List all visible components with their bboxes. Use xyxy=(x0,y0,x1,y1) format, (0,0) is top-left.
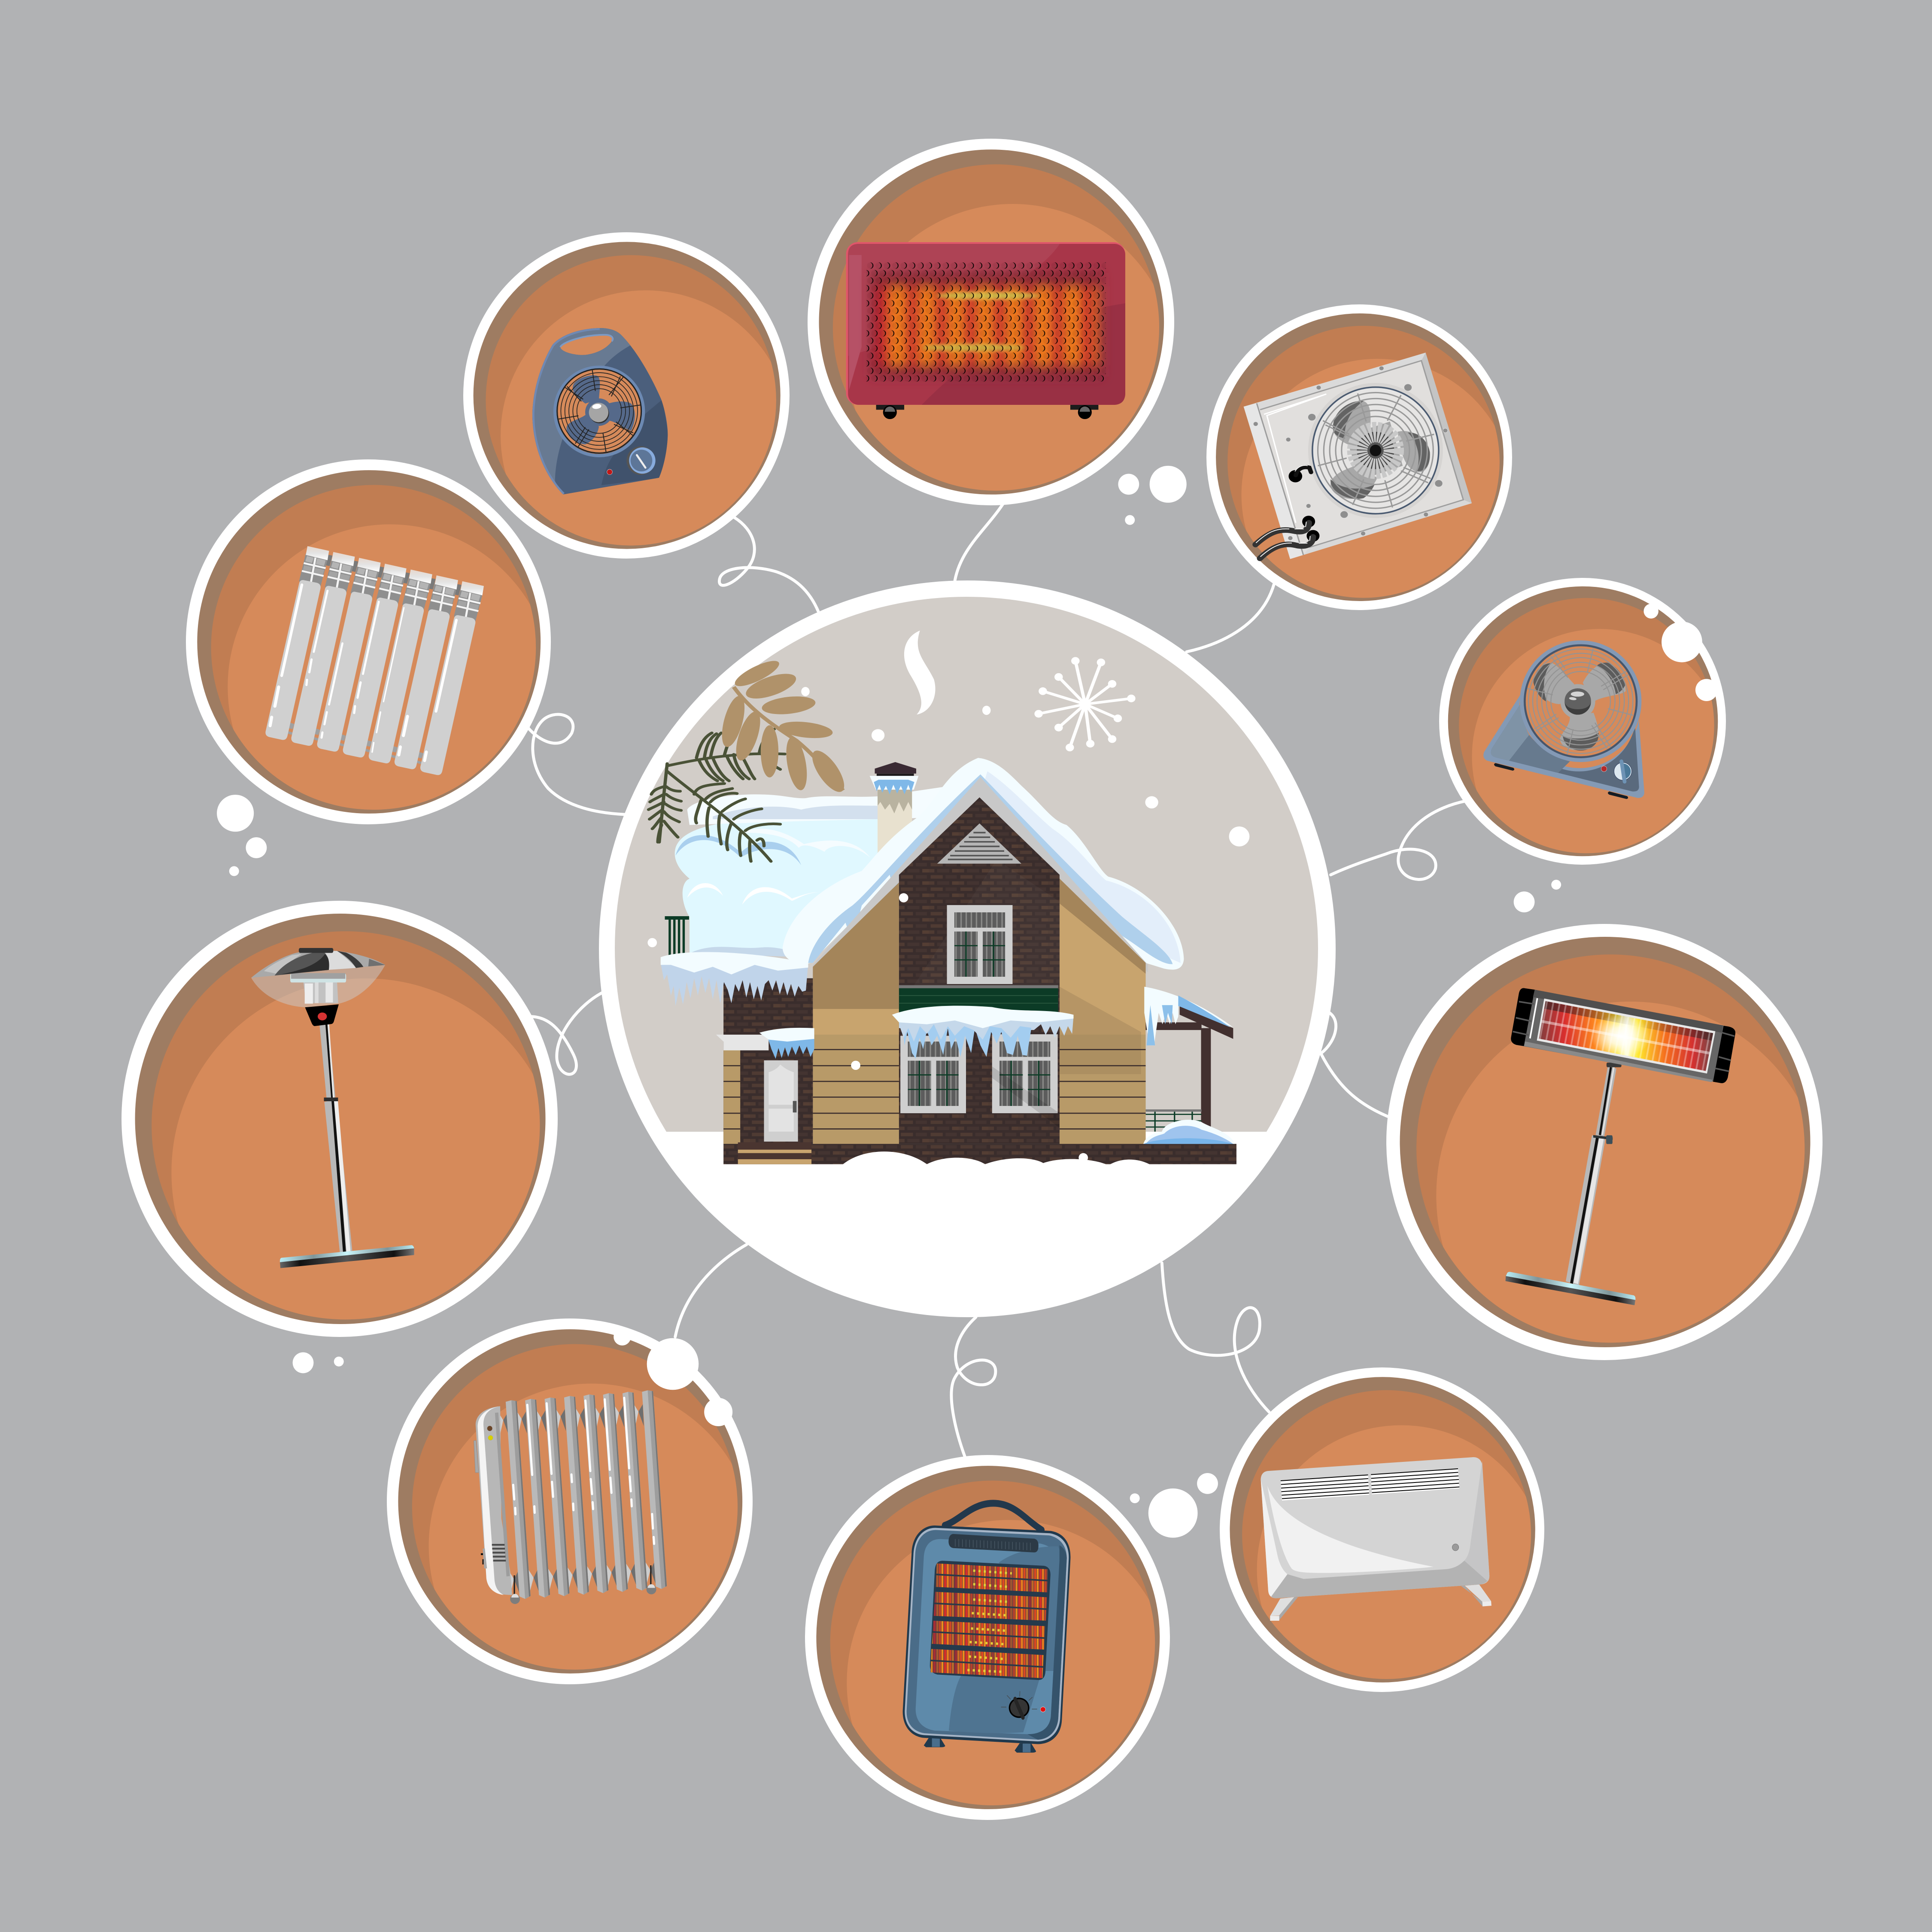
infographic canvas xyxy=(122,139,1823,1820)
snow-covered side roof xyxy=(675,787,945,957)
legs xyxy=(1279,1597,1298,1620)
panel: portable quartz heater xyxy=(805,1455,1172,1845)
panel: wall-mounted fan heater xyxy=(1206,304,1513,631)
icon: oil radiator xyxy=(474,1390,667,1604)
screws xyxy=(1253,366,1448,540)
left eave snow and icicles xyxy=(661,952,808,1006)
knobs xyxy=(513,1575,515,1595)
winter sky xyxy=(615,597,1318,1132)
disc xyxy=(387,1318,754,1709)
feet xyxy=(1494,763,1514,771)
left wing brick xyxy=(723,978,813,1144)
smoke xyxy=(904,631,936,714)
snowflake xyxy=(1034,657,1136,751)
feet xyxy=(924,1738,945,1747)
grille xyxy=(930,1561,1051,1680)
handle xyxy=(945,1503,1042,1530)
green railing behind xyxy=(665,916,689,957)
left wing siding xyxy=(723,1050,740,1144)
disc xyxy=(122,901,560,1367)
base xyxy=(723,1144,1236,1164)
stand base xyxy=(280,1248,414,1268)
blades xyxy=(1333,401,1370,445)
hub dome xyxy=(1564,688,1591,715)
knob and LED xyxy=(626,446,655,475)
disc xyxy=(805,1455,1172,1845)
connector lines xyxy=(527,504,1466,1456)
vents xyxy=(1281,1468,1459,1501)
panel: wall convector xyxy=(1220,1367,1546,1714)
panel: central house scene xyxy=(599,580,1336,1317)
falling snow dots xyxy=(647,687,1249,1162)
roof snow xyxy=(783,758,1184,972)
icon: blue quartz heater xyxy=(903,1503,1070,1753)
pine branches xyxy=(649,729,785,861)
door xyxy=(764,1060,798,1142)
motor mount xyxy=(1346,422,1403,480)
chimney xyxy=(870,762,918,854)
highlights xyxy=(270,585,456,760)
ground snow xyxy=(841,1151,1153,1166)
knob and LED xyxy=(1601,766,1607,772)
icon: white convector xyxy=(1261,1457,1492,1621)
steps xyxy=(738,1142,811,1164)
panel: patio heater xyxy=(122,901,560,1367)
right porch xyxy=(1144,987,1233,1132)
disc xyxy=(1206,304,1513,631)
central circle xyxy=(599,580,1336,1317)
disc xyxy=(1439,578,1727,884)
disc xyxy=(808,139,1176,530)
panel: desk fan xyxy=(1439,578,1727,884)
disc xyxy=(1386,924,1825,1390)
glow xyxy=(871,273,1102,377)
icon: red heater xyxy=(846,242,1125,419)
balcony icicles xyxy=(892,1005,1073,1059)
porch canopy xyxy=(716,1035,769,1050)
vent xyxy=(948,1534,1039,1552)
guard xyxy=(1318,392,1434,508)
balcony xyxy=(899,985,1058,1012)
icon: blue fan heater xyxy=(531,326,670,497)
fan assembly xyxy=(1308,383,1443,518)
disc xyxy=(463,232,791,581)
reflector bowl xyxy=(251,965,385,1007)
guard xyxy=(1527,648,1633,754)
heating elements xyxy=(936,1564,1048,1592)
panel: infrared heater on stand xyxy=(1386,924,1825,1390)
icon: aluminium radiator xyxy=(265,546,484,775)
control box xyxy=(305,1004,339,1026)
panel: oil radiator xyxy=(387,1318,754,1709)
lower windows xyxy=(900,1034,1060,1128)
base xyxy=(1483,696,1644,798)
body xyxy=(1261,1457,1489,1598)
knob xyxy=(1001,1691,1037,1709)
panel: red quartz heater xyxy=(808,139,1176,530)
cables xyxy=(1288,470,1302,482)
panel: fan heater xyxy=(463,232,791,581)
icon: desk fan xyxy=(1483,642,1644,799)
heating window xyxy=(1538,1000,1714,1072)
dome xyxy=(251,951,385,978)
plate xyxy=(1244,352,1472,559)
pole xyxy=(324,1024,349,1252)
fin highlights xyxy=(513,1398,654,1544)
blades xyxy=(567,375,635,444)
disc xyxy=(186,459,553,849)
snow pile xyxy=(1143,1120,1235,1144)
control xyxy=(1452,1544,1459,1551)
gable vent xyxy=(937,823,1021,864)
body xyxy=(903,1525,1070,1744)
decorative bubbles xyxy=(217,466,1718,1538)
stand base xyxy=(1506,1276,1635,1305)
icon: infrared stand heater xyxy=(1506,988,1735,1305)
brick gable front xyxy=(899,797,1060,1144)
pole xyxy=(1571,1067,1614,1283)
icon: wall fan unit xyxy=(1244,352,1472,559)
tan side walls xyxy=(813,878,1146,1144)
autumn branch xyxy=(717,656,851,796)
door canopy icicles xyxy=(759,1028,814,1059)
icon: patio heater xyxy=(251,948,414,1268)
blades xyxy=(1534,663,1574,704)
panel: aluminium radiator xyxy=(186,459,553,849)
hub xyxy=(589,404,609,423)
guard xyxy=(557,369,641,453)
upper window xyxy=(947,905,1012,984)
side panel xyxy=(476,1406,512,1595)
head xyxy=(1511,988,1735,1083)
house illustration xyxy=(647,631,1249,1166)
disc xyxy=(1220,1367,1546,1714)
